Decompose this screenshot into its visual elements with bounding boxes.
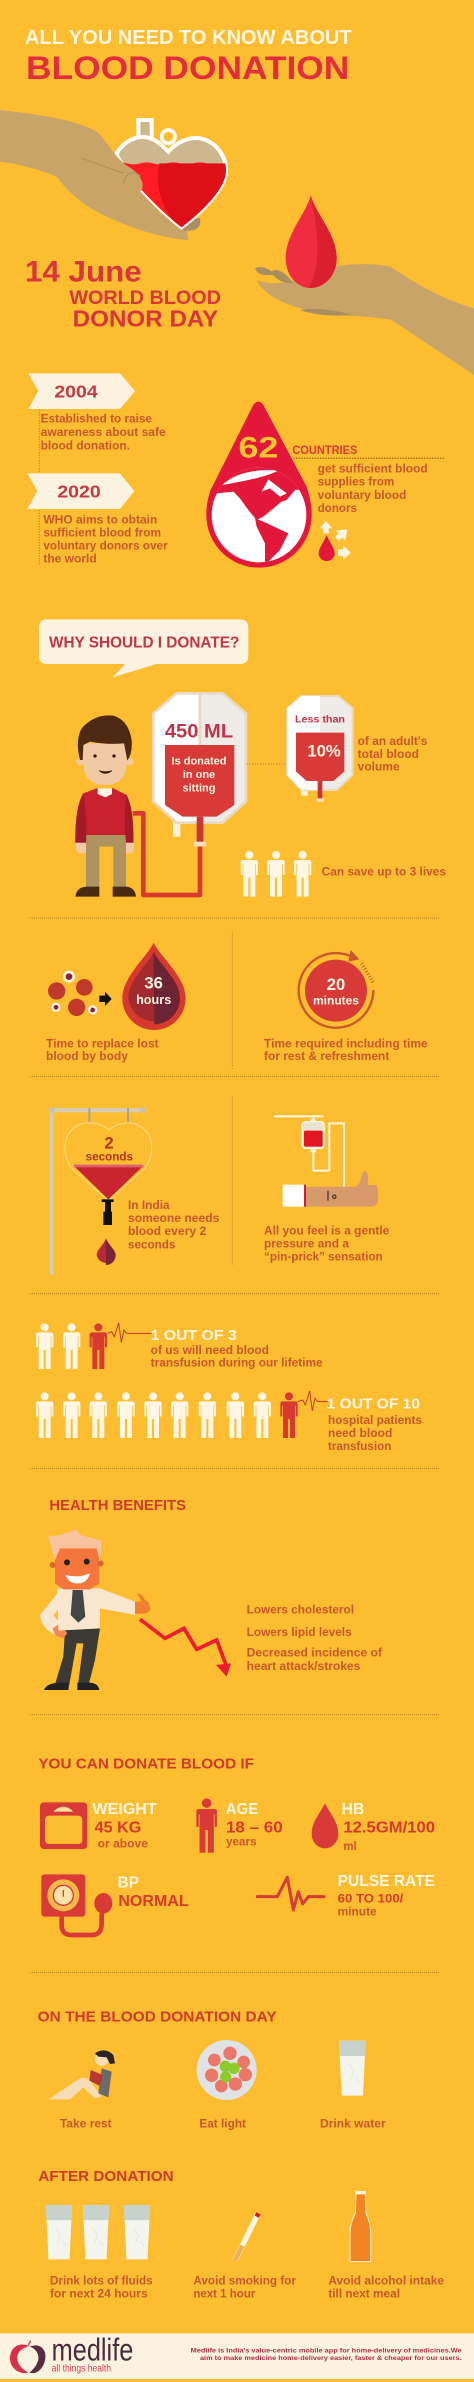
- text: pin-prick: All you feel is a gentle: [264, 1224, 390, 1238]
- heading: you can donate: YOU CAN DONATE BLOOD IF: [38, 1756, 254, 1772]
- weight: WEIGHT: [92, 1801, 157, 1818]
- weight: 45 KG: [95, 1820, 141, 1837]
- hemoglobin: 12.5GM/100: [343, 1820, 435, 1837]
- text: of an adult's total blood volume: [358, 734, 428, 774]
- text: 1 out of 10: hospital patients: [328, 1413, 422, 1427]
- text: 1 out of 10: transfusion: [328, 1439, 391, 1453]
- speech bubble: why should I donate: [39, 619, 248, 677]
- title line 2: BLOOD DONATION: [26, 50, 349, 86]
- age: years: [226, 1835, 257, 1849]
- icon: falling arrow: [140, 1619, 231, 1677]
- countries text: supplies from: [318, 475, 394, 489]
- age: AGE: [226, 1801, 258, 1818]
- text: in India: [128, 1198, 220, 1251]
- caption: avoid alcohol: Avoid alcohol intake: [328, 2274, 444, 2288]
- footer description: [191, 2349, 462, 2362]
- blood pressure: BP: [118, 1874, 139, 1891]
- icon: cigarette: [235, 2213, 259, 2261]
- milestone 2004: 2004: [54, 382, 98, 402]
- icon: globe in blood drop: 62: [238, 432, 278, 465]
- people row 1 out of 3: [36, 1323, 152, 1369]
- milestone 2020: the world: [43, 552, 97, 566]
- blood pressure: [41, 1874, 189, 1935]
- caption: eat light: Eat light: [199, 2117, 246, 2131]
- caption: take rest: Take rest: [60, 2117, 112, 2131]
- icon: 36 hours drop: hours: [136, 993, 171, 1007]
- blood bag: less than 10%: [287, 696, 353, 802]
- text: time to replace: [46, 1036, 159, 1063]
- caption: avoid smoking: [193, 2274, 296, 2300]
- footer description: aim to make medicine home-delivery easier, faster & cheaper for our users.: [200, 2356, 462, 2362]
- text: time required: for rest & refreshment: [264, 1049, 389, 1063]
- blood bag: 450 ml: sitting: [183, 782, 215, 794]
- icon: plate of food: [197, 2040, 257, 2100]
- text: in India: seconds: [128, 1237, 176, 1251]
- countries text: [292, 443, 445, 515]
- section: statistics and benefits: [30, 1323, 440, 1690]
- milestone 2020: WHO aims to obtain: [43, 512, 157, 526]
- text: 1 out of 10: 1 OUT OF 10: [327, 1396, 420, 1412]
- text: benefits list: [247, 1602, 383, 1673]
- text: pin-prick: “pin-prick” sensation: [264, 1250, 383, 1264]
- hemoglobin: [312, 1801, 435, 1853]
- age: 18 – 60: [226, 1820, 283, 1837]
- text: of an adult's total blood volume: volume: [358, 760, 400, 774]
- text: in India: someone needs: [128, 1211, 220, 1225]
- blood bag: less than 10%: Less than: [295, 714, 345, 725]
- caption: avoid alcohol: [328, 2274, 444, 2300]
- section: time facts: [30, 943, 440, 1294]
- icon: globe in blood drop: [206, 402, 313, 568]
- milestone 2004: [28, 373, 166, 473]
- milestone 2004: Established to raise: [41, 412, 152, 426]
- age: [196, 1798, 283, 1853]
- text: in India: In India: [128, 1198, 170, 1212]
- icon: bottle: [350, 2191, 371, 2262]
- figure: businessman thumbs up: [40, 1529, 150, 1690]
- milestone 2004: awareness about safe: [41, 425, 166, 439]
- section: eligibility: [30, 1715, 440, 1973]
- hemoglobin: HB: [342, 1801, 364, 1818]
- speech bubble: why should I donate: WHY SHOULD I DONATE?: [49, 634, 239, 651]
- title line 1: ALL YOU NEED TO KNOW ABOUT: [25, 27, 352, 49]
- milestone 2020: voluntary donors over: [43, 539, 168, 553]
- pulse rate: PULSE RATE: [338, 1873, 435, 1890]
- icon: 20 minutes clock: minutes: [313, 993, 359, 1007]
- caption: drink fluids: Drink lots of fluids: [50, 2274, 153, 2288]
- text: time required: Time required including time: [264, 1036, 428, 1050]
- blood bag: 450 ml: [153, 693, 246, 846]
- pulse rate: minute: [338, 1905, 377, 1919]
- text: can save lives: Can save up to 3 lives: [322, 865, 446, 879]
- icon: heart drip stand: seconds: [86, 1151, 133, 1164]
- weight: [40, 1801, 157, 1850]
- text: in India: blood every 2: [128, 1224, 207, 1238]
- text: 1 out of 3: transfusion during our lifetime: [151, 1356, 323, 1370]
- pulse rate: 60 TO 100/: [338, 1891, 404, 1905]
- blood bag: less than 10%: 10%: [307, 742, 341, 761]
- date 14 June: 14 June: [25, 256, 142, 289]
- section: why donate: [30, 693, 446, 1068]
- caption: avoid smoking: Avoid smoking for: [193, 2274, 296, 2288]
- footer band: [0, 2332, 474, 2379]
- text: benefits list: heart attack/strokes: [247, 1659, 361, 1673]
- pulse rate: [257, 1873, 435, 1919]
- weight: or above: [98, 1836, 148, 1850]
- text: 1 out of 3: 1 OUT OF 3: [151, 1328, 237, 1344]
- people row 1 out of 10: [36, 1391, 328, 1438]
- countries text: get sufficient blood: [318, 461, 428, 475]
- icon: glass of water: [339, 2041, 366, 2096]
- milestone 2020: [27, 473, 168, 566]
- icon: woman resting: [48, 2050, 115, 2099]
- caption: avoid alcohol: till next meal: [328, 2286, 400, 2300]
- world blood donor day: DONOR DAY: [73, 306, 218, 332]
- heading: after donation: AFTER DONATION: [38, 2169, 174, 2185]
- text: 1 out of 3: [151, 1328, 323, 1370]
- figure: donating man: [75, 715, 200, 897]
- icon: drop with arrows: [319, 521, 351, 561]
- text: 1 out of 10: need blood: [328, 1426, 392, 1440]
- countries text: donors: [318, 501, 357, 515]
- caption: drink water: Drink water: [320, 2117, 386, 2131]
- icon: three glasses: [46, 2205, 150, 2259]
- hemoglobin: ml: [343, 1839, 357, 1853]
- icon: blood cells: [48, 971, 112, 1016]
- text: time to replace: blood by body: [46, 1049, 128, 1063]
- blood pressure: NORMAL: [118, 1893, 189, 1910]
- text: 1 out of 3: of us will need blood: [151, 1343, 269, 1357]
- milestone 2004: blood donation.: [41, 438, 130, 452]
- world blood donor day: [69, 288, 221, 332]
- blood bag: 450 ml: in one: [183, 769, 215, 781]
- text: pin-prick: pressure and a: [264, 1236, 349, 1250]
- text: benefits list: Decreased incidence of: [247, 1646, 383, 1660]
- section: header: [0, 27, 474, 375]
- blood bag: 450 ml: Is donated: [172, 756, 226, 768]
- icon: arm with drip: [274, 1115, 378, 1207]
- text: of an adult's total blood volume: total blood: [358, 747, 419, 761]
- text: of an adult's total blood volume: of an adult's: [358, 734, 428, 748]
- icon: three people: [241, 851, 311, 897]
- heading: health benefits: HEALTH BENEFITS: [49, 1498, 186, 1514]
- logo: medlife: medlife: [52, 2332, 133, 2368]
- text: benefits list: Lowers cholesterol: [247, 1602, 354, 1616]
- caption: drink fluids: [50, 2274, 153, 2300]
- icon: 20 minutes clock: [299, 950, 374, 1028]
- blood bag: 450 ml: 450 ML: [165, 721, 233, 742]
- icon: hand receiving blood drop: [255, 195, 474, 375]
- icon: heart drip stand: 2: [104, 1133, 114, 1152]
- caption: drink fluids: for next 24 hours: [50, 2286, 148, 2300]
- icon: 20 minutes clock: 20: [327, 975, 345, 994]
- countries text: voluntary blood: [318, 488, 406, 502]
- text: benefits list: Lowers lipid levels: [247, 1625, 352, 1639]
- text: time to replace: Time to replace lost: [46, 1036, 159, 1050]
- section: history and countries: [27, 373, 445, 677]
- milestone 2020: 2020: [57, 482, 101, 502]
- logo: medlife: all things health: [52, 2364, 111, 2375]
- heading: on the blood donation day: ON THE BLOOD DONATION DAY: [38, 2010, 277, 2026]
- icon: hand holding heart blood bag: [0, 110, 233, 240]
- icon: 36 hours drop: [122, 943, 186, 1030]
- section: donation day and after: [0, 2010, 474, 2379]
- footer description: Medlife is India's value-centric mobile app for home-delivery of medicines.We: [191, 2349, 462, 2355]
- milestone 2020: sufficient blood from: [43, 525, 161, 539]
- text: time required: [264, 1036, 428, 1063]
- text: 1 out of 10: [327, 1396, 422, 1453]
- icon: 36 hours drop: 36: [144, 973, 163, 992]
- countries text: COUNTRIES: [292, 443, 357, 457]
- caption: avoid smoking: next 1 hour: [193, 2286, 256, 2300]
- logo: medlife: [10, 2332, 133, 2375]
- world blood donor day: WORLD BLOOD: [69, 288, 221, 309]
- text: pin-prick: [264, 1224, 390, 1264]
- icon: heart drip stand: [49, 1107, 152, 1275]
